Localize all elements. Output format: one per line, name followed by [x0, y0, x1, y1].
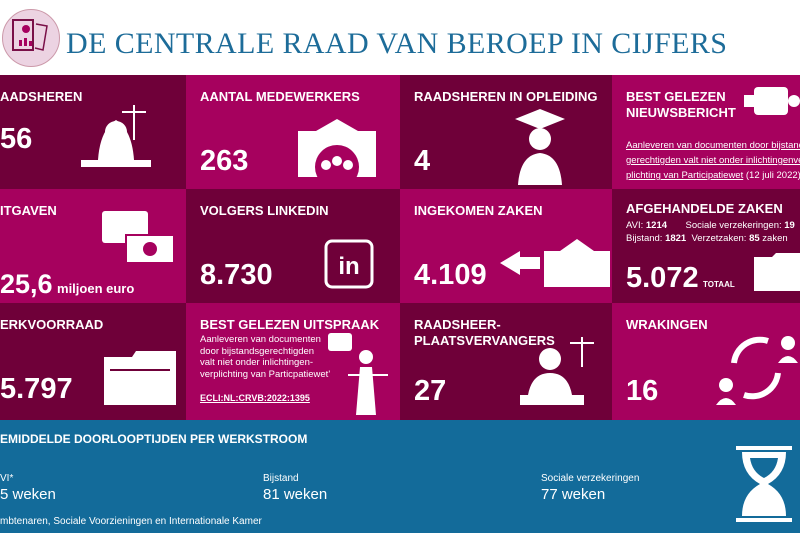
panel: uitspraak: valt niet onder inlichtingen- — [200, 357, 313, 368]
panel: medewerkers: AANTAL MEDEWERKERS — [200, 89, 360, 104]
panel: werkvoorraad — [0, 303, 186, 420]
panel: ingekomen zaken — [400, 189, 612, 303]
panel: werkvoorraad: 5.797 — [0, 373, 73, 405]
panel: raadsheren in opleiding: RAADSHEREN IN OPLEIDING — [414, 89, 597, 104]
panel: wrakingen: WRAKINGEN — [626, 317, 708, 332]
panel: uitspraak: Aanleveren van documenten — [200, 334, 321, 345]
panel: afgehandelde zaken: Bijstand: 1821 Verzetzaken: 85 zaken — [626, 233, 788, 244]
panel: raadsheren in opleiding — [400, 75, 612, 189]
panel: afgehandelde zaken: 5.072 TOTAAL — [626, 262, 735, 294]
panel: linkedin — [186, 189, 400, 303]
icon: building — [298, 119, 376, 177]
panel: uitspraak — [186, 303, 400, 420]
panel: uitspraak: BEST GELEZEN UITSPRAAK — [200, 317, 379, 332]
panel: raadsheren in opleiding: 4 — [414, 145, 430, 177]
panel: raadsheren — [0, 75, 186, 189]
panel: uitgaven: 25,6 miljoen euro — [0, 269, 134, 299]
title: DE CENTRALE RAAD VAN BEROEP IN CIJFERS — [66, 27, 727, 60]
icon: judge — [81, 105, 151, 167]
panel: ingekomen zaken: 4.109 — [414, 259, 487, 291]
icon: building arrow — [500, 239, 610, 287]
panel: uitspraak: door bijstandsgerechtigden — [200, 346, 314, 356]
panel: werkvoorraad: ERKVOORRAAD — [0, 317, 103, 332]
panel: plaatsvervangers: RAADSHEER- — [414, 317, 501, 332]
panel: afgehandelde zaken: AFGEHANDELDE ZAKEN — [626, 201, 783, 216]
icon: linkedin: in — [338, 253, 360, 280]
panel: doorlooptijden: 81 weken — [263, 486, 327, 503]
panel: medewerkers — [186, 75, 400, 189]
panel: afgehandelde zaken — [612, 189, 800, 303]
panel: medewerkers: 263 — [200, 145, 248, 177]
panel: uitspraak: verplichting van Particpatiewet' — [200, 368, 330, 380]
panel: linkedin: VOLGERS LINKEDIN — [200, 203, 329, 218]
panel: nieuwsbericht: gerechtigden valt niet onder inlichtingenve — [626, 155, 800, 166]
panel: uitgaven: ITGAVEN — [0, 203, 57, 218]
icon: folder — [104, 351, 176, 405]
panel: plaatsvervangers: 27 — [414, 375, 446, 407]
panel: wrakingen: 16 — [626, 375, 658, 407]
panel: ingekomen zaken: INGEKOMEN ZAKEN — [414, 203, 543, 218]
panel: nieuwsbericht: NIEUWSBERICHT — [626, 105, 736, 120]
panel: plaatsvervangers — [400, 303, 612, 420]
panel: raadsheren: AADSHEREN — [0, 89, 82, 104]
icon: folder — [754, 253, 800, 291]
panel: doorlooptijden — [0, 420, 800, 533]
icon: cycle — [716, 336, 798, 405]
panel: linkedin: 8.730 — [200, 259, 273, 291]
panel: afgehandelde zaken: AVI: 1214 Sociale verzekeringen: 19 — [626, 220, 795, 231]
panel: uitgaven — [0, 189, 186, 303]
panel: raadsheren: 56 — [0, 123, 32, 155]
panel: doorlooptijden: Bijstand — [263, 473, 299, 484]
panel: uitspraak: ECLI:NL:CRVB:2022:1395 — [200, 393, 310, 403]
icon: wallet — [102, 211, 173, 262]
icon: hourglass — [736, 446, 792, 522]
icon: linkedin — [324, 240, 374, 288]
panel: nieuwsbericht: plichting van Participatiewet (12 juli 2022) — [626, 170, 800, 181]
icon: judge — [520, 337, 594, 405]
panel: wrakingen — [612, 303, 800, 420]
panel: nieuwsbericht: BEST GELEZEN — [626, 89, 726, 104]
panel: plaatsvervangers: PLAATSVERVANGERS — [414, 333, 555, 348]
icon: camera — [744, 87, 800, 115]
panel: doorlooptijden: Sociale verzekeringen — [541, 473, 639, 484]
panel: doorlooptijden: 77 weken — [541, 486, 605, 503]
panel: nieuwsbericht: Aanleveren van documenten door bijstand — [626, 140, 800, 151]
panel: doorlooptijden: EMIDDELDE DOORLOOPTIJDEN PER WERKSTROOM — [0, 432, 307, 446]
panel: doorlooptijden: 5 weken — [0, 486, 56, 503]
icon: graduate — [515, 109, 565, 185]
panel: doorlooptijden: VI* — [0, 473, 13, 484]
header icon — [2, 9, 60, 67]
panel: nieuwsbericht — [612, 75, 800, 189]
panel: doorlooptijden: mbtenaren, Sociale Voorzieningen en Internationale Kamer — [0, 516, 262, 527]
icon: justitia — [328, 333, 388, 415]
